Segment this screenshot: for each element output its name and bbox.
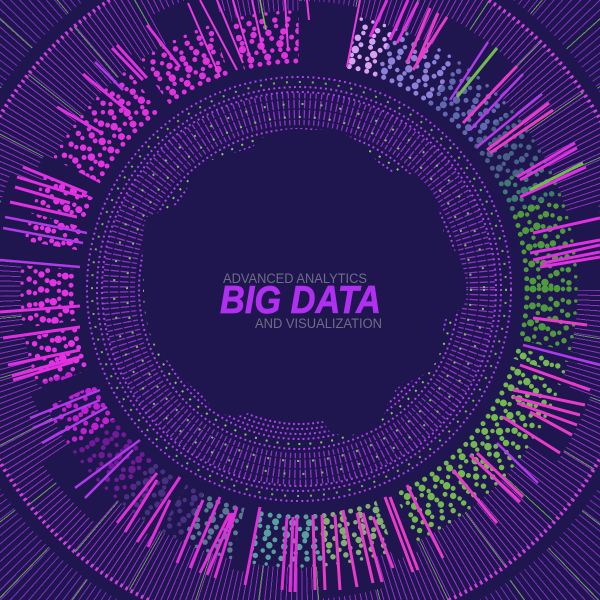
ring gap between dots and particles — [80, 70, 518, 508]
inner dotted sphere ring — [87, 77, 511, 501]
subtitle: and visualization: AND VISUALIZATION — [255, 316, 382, 331]
heading: big data: BIG DATA — [220, 279, 381, 322]
title text block — [220, 271, 382, 331]
particle ring sector gaps — [44, 34, 554, 544]
central dark blob — [143, 129, 466, 435]
subtitle: advanced analytics: ADVANCED ANALYTICS — [223, 271, 367, 286]
